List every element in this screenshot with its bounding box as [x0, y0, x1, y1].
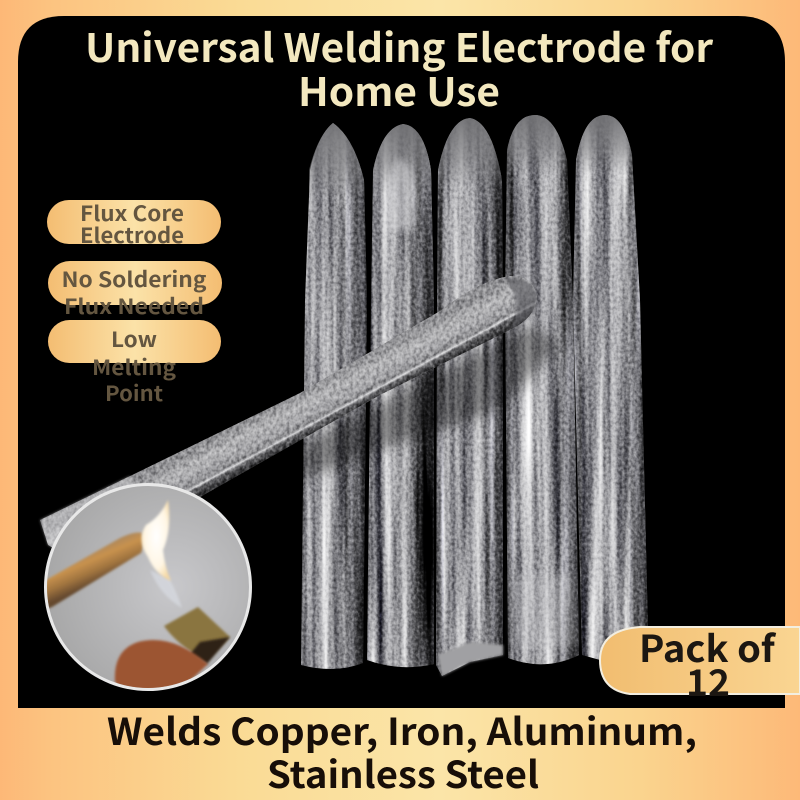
badge: Flux Core Electrode: Flux Core	[80, 198, 184, 228]
badge: Flux Core Electrode: Electrode	[80, 220, 184, 250]
badge: Pack of 12: Pack of	[639, 619, 776, 673]
electrode rods photo	[40, 115, 648, 676]
badge: No Soldering Flux Needed: No Soldering	[62, 264, 207, 294]
rod 2	[367, 124, 434, 667]
inset circle: lighter flame melting electrode	[44, 484, 250, 694]
badge: Low Melting Point: Point	[105, 378, 163, 408]
icon: flame glow	[151, 571, 181, 606]
badge: Pack of 12: 12	[686, 653, 730, 707]
badge: No Soldering Flux Needed	[48, 261, 222, 321]
badge: Low Melting Point: Low	[111, 324, 157, 354]
caption: materials welded: Welds Copper, Iron, Aluminum,	[107, 702, 697, 756]
badge: Pack of 12	[600, 619, 800, 707]
badge: Low Melting Point	[48, 320, 221, 408]
rod 6: diagonal electrode	[40, 276, 537, 552]
badge: Flux Core Electrode	[47, 198, 221, 250]
icon: flame	[141, 500, 171, 581]
shadow under diagonal rod	[300, 325, 560, 480]
icon: copper rod	[44, 533, 143, 610]
caption: materials welded	[107, 702, 697, 799]
title	[85, 18, 714, 118]
badge: Low Melting Point: Melting	[92, 352, 176, 382]
rod 4	[505, 115, 579, 664]
caption: materials welded: Stainless Steel	[267, 745, 539, 799]
title: Universal Welding Electrode for	[85, 18, 714, 74]
rod 5	[573, 115, 648, 660]
badge: No Soldering Flux Needed: Flux Needed	[64, 291, 204, 321]
rod 1	[301, 123, 367, 669]
title: Home Use	[298, 62, 500, 118]
icon: lighter	[164, 607, 230, 660]
rod 3	[436, 118, 503, 676]
icon: fingertip	[115, 640, 208, 694]
